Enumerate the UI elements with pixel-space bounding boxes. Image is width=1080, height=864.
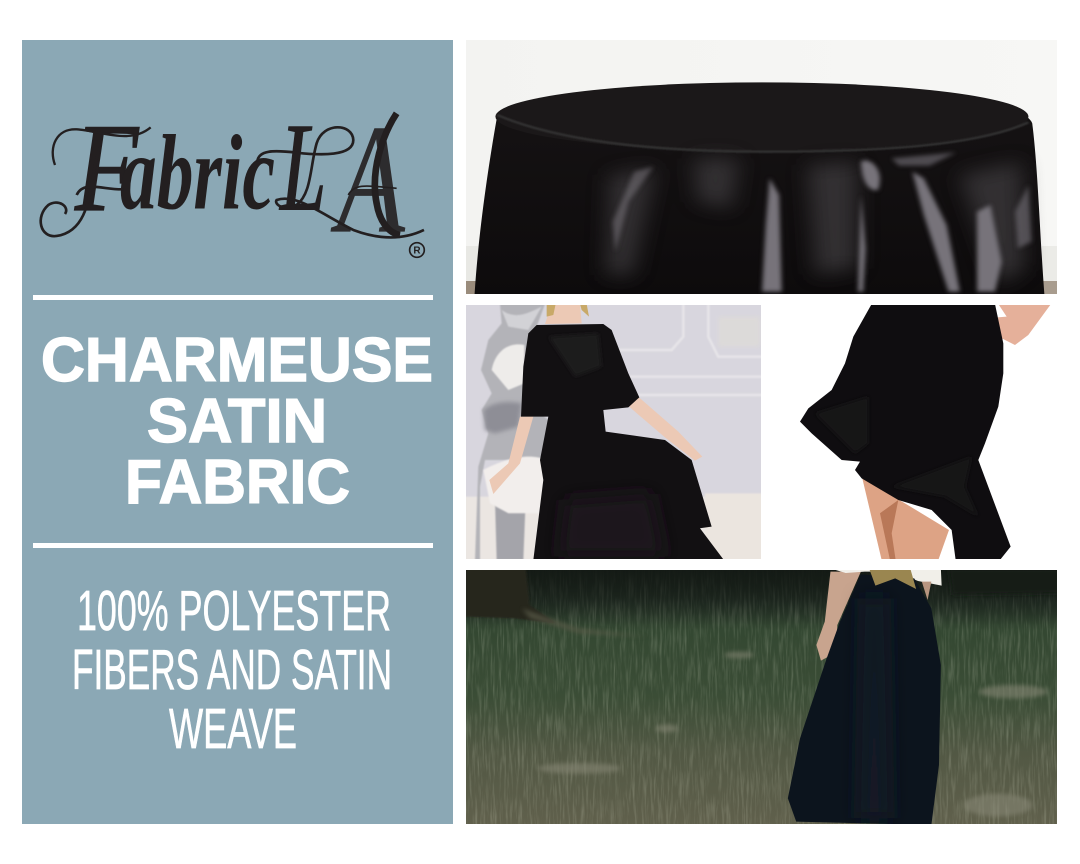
text: fabric composition: WEAVE bbox=[169, 697, 297, 761]
registered mark: R bbox=[413, 246, 421, 257]
logo: FabricLA: F bbox=[74, 98, 140, 238]
text: fabric composition: FIBERS AND SATIN bbox=[72, 638, 392, 702]
black gown bbox=[521, 324, 723, 560]
panel: brand sidebar bbox=[22, 40, 453, 824]
arm bbox=[816, 572, 861, 661]
photo: woman seated in black gown bbox=[465, 304, 762, 563]
heading: product name: SATIN bbox=[147, 387, 327, 456]
logo: FabricLA: abric bbox=[120, 114, 275, 232]
photo: woman in long black skirt in grass field bbox=[465, 569, 1060, 825]
skin: neck, arms bbox=[489, 304, 702, 494]
photo: black ruffled skirt on white bbox=[800, 305, 1050, 559]
skirt bbox=[800, 304, 1011, 560]
logo: FabricLA: A bbox=[330, 92, 406, 266]
blouse bbox=[832, 569, 942, 586]
registered mark bbox=[410, 243, 424, 257]
tablecloth bbox=[475, 82, 1044, 295]
long skirt bbox=[788, 574, 941, 825]
photo: black satin round tablecloth bbox=[466, 40, 1057, 295]
wall mouldings bbox=[608, 304, 762, 395]
rug bbox=[466, 496, 705, 559]
grass debris bbox=[537, 652, 1047, 816]
heading: product name: FABRIC bbox=[125, 448, 350, 517]
tree trunk bbox=[465, 569, 556, 623]
logo: FabricLA bbox=[41, 92, 424, 266]
text: fabric composition: 100% POLYESTER bbox=[77, 579, 391, 643]
heading: product name bbox=[41, 326, 433, 517]
arm and hand bbox=[998, 305, 1050, 345]
legs bbox=[862, 478, 949, 560]
heading: product name: CHARMEUSE bbox=[41, 326, 433, 395]
embroidered waist bbox=[869, 569, 916, 589]
divider: lower bbox=[33, 543, 433, 548]
silver chair bbox=[475, 304, 548, 560]
divider: upper bbox=[33, 295, 433, 300]
text: fabric composition bbox=[72, 579, 392, 761]
logo: FabricLA: L bbox=[279, 97, 327, 237]
